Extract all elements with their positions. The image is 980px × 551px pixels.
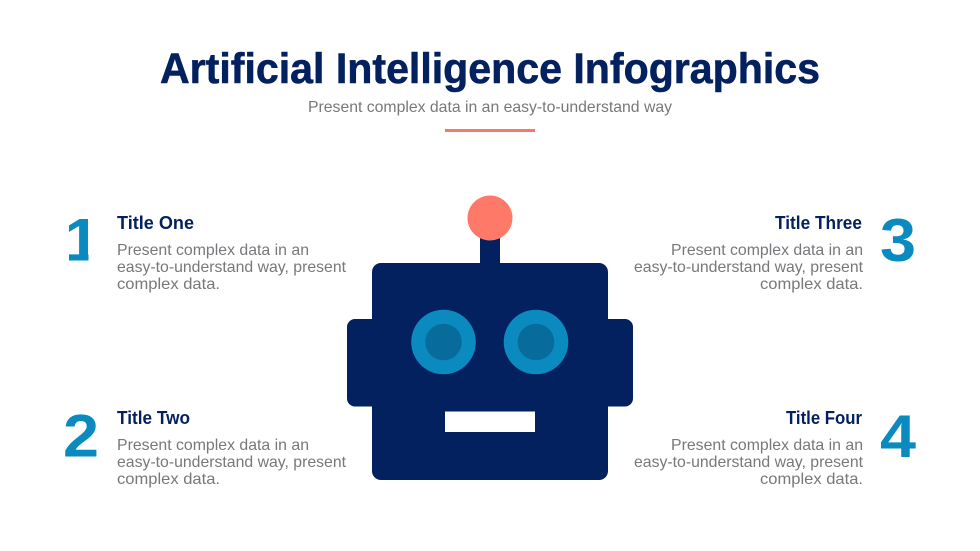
robot right eye xyxy=(504,310,568,374)
item two xyxy=(63,402,347,488)
robot face xyxy=(372,263,608,480)
heading: title four: Title Four xyxy=(786,408,862,428)
subtitle: Present complex data in an easy-to-understand way xyxy=(308,99,672,116)
heading: title two: Title Two xyxy=(117,408,190,428)
number 4: 4 xyxy=(880,403,917,470)
body text two: Present complex data in an xyxy=(117,437,309,454)
heading: title one: Title One xyxy=(117,213,194,233)
body text four: Present complex data in an xyxy=(671,437,863,454)
body text three: complex data. xyxy=(760,276,863,293)
robot antenna stem xyxy=(480,232,500,265)
number 3: 3 xyxy=(880,207,916,274)
body text two: easy-to-understand way, present xyxy=(117,454,347,471)
body text two: complex data. xyxy=(117,471,220,488)
body text three: Present complex data in an xyxy=(671,242,863,259)
body text three: easy-to-understand way, present xyxy=(634,259,864,276)
item four xyxy=(634,403,917,488)
robot ears xyxy=(347,319,633,406)
number 1: 1 xyxy=(64,206,100,274)
body text four: easy-to-understand way, present xyxy=(634,454,864,471)
robot antenna ball xyxy=(468,196,512,240)
body text one: complex data. xyxy=(117,276,220,293)
title: Artificial Intelligence Infographics xyxy=(160,45,820,93)
body text one: Present complex data in an xyxy=(117,242,309,259)
body text four: complex data. xyxy=(760,471,863,488)
robot left eye xyxy=(411,310,476,374)
item three xyxy=(634,207,916,293)
number 2: 2 xyxy=(63,402,99,470)
icon: robot head xyxy=(347,196,633,480)
body text one: easy-to-understand way, present xyxy=(117,259,347,276)
robot mouth xyxy=(445,412,535,432)
accent underline xyxy=(445,129,535,132)
heading: title three: Title Three xyxy=(775,213,862,233)
item one xyxy=(69,216,346,292)
